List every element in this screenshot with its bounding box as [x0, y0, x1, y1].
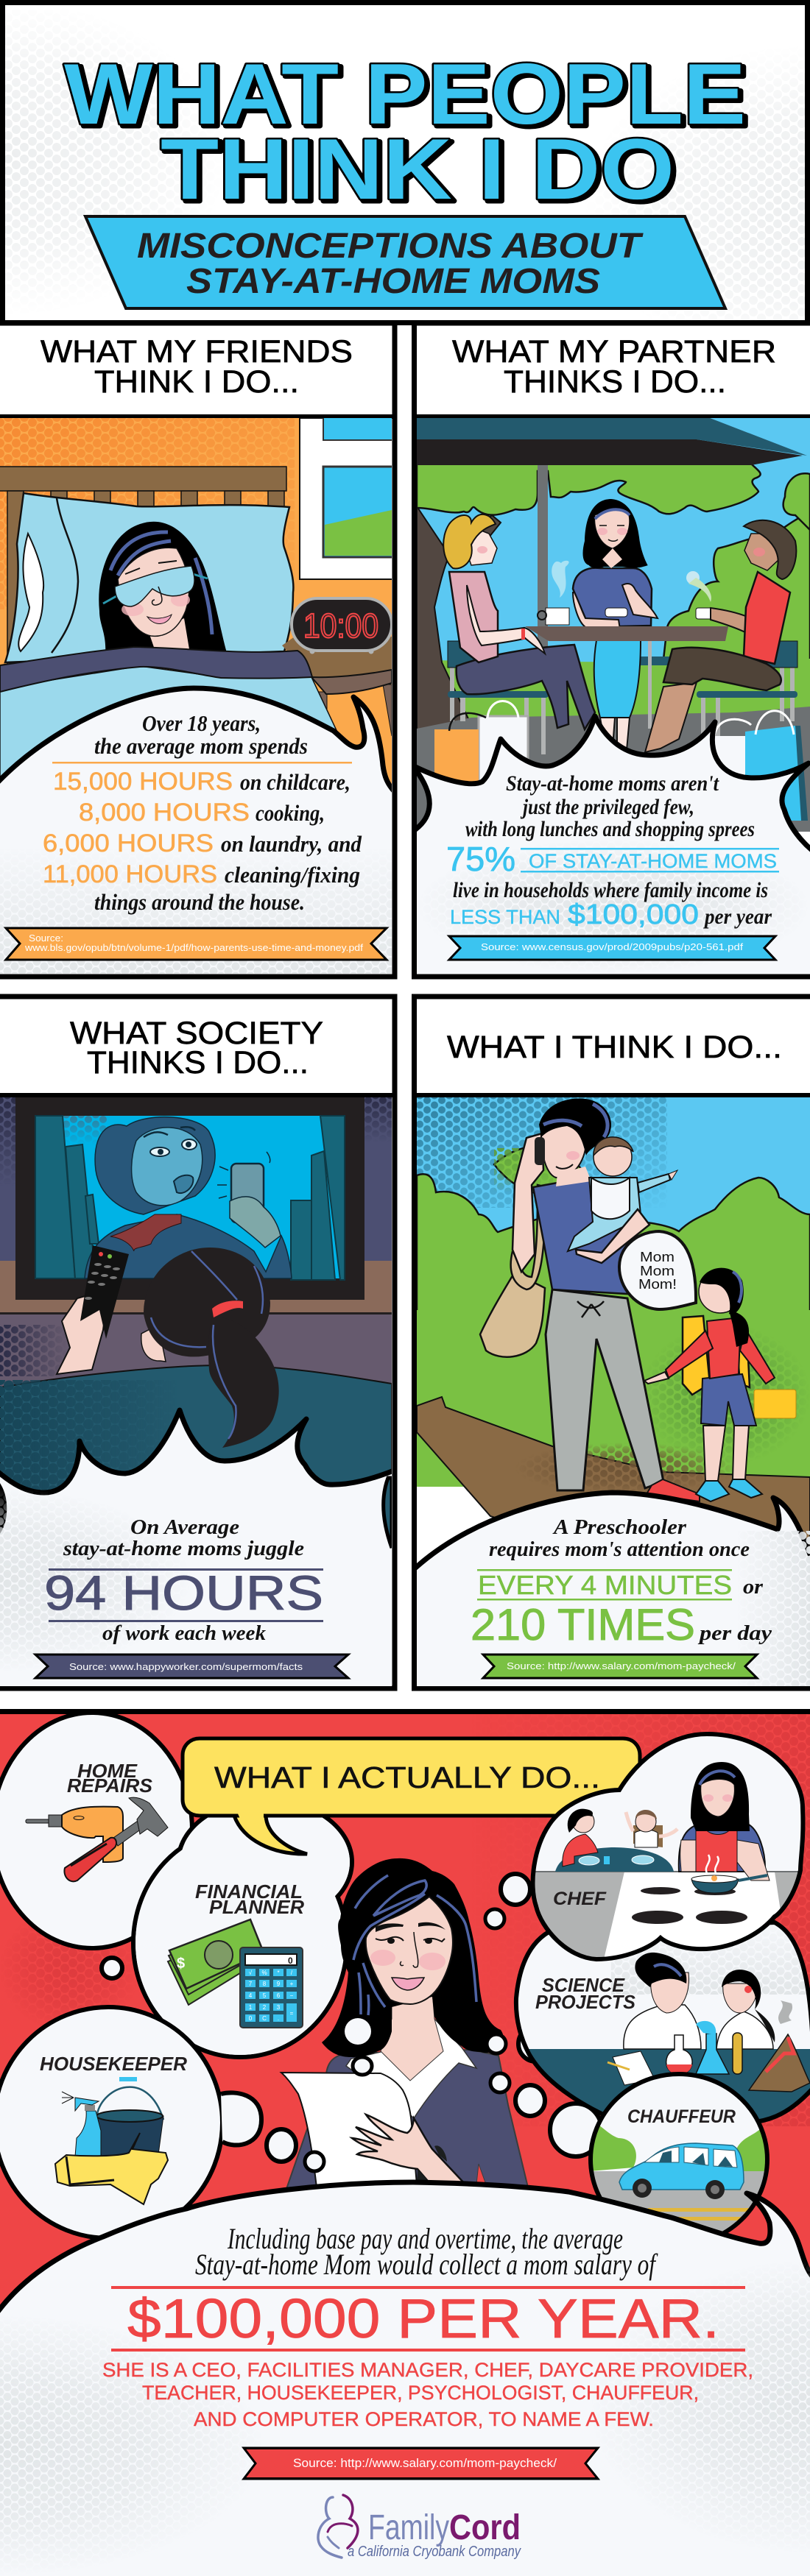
icon: calculator: 0 [249, 2015, 253, 2022]
title line: what people: WHAT PEOPLE [67, 48, 749, 144]
label: REPAIRS [67, 1774, 153, 1797]
source ribbon [6, 928, 387, 960]
headboard [0, 467, 286, 668]
frying pan [691, 1855, 767, 1893]
stats text: A Preschooler [552, 1516, 687, 1539]
speech bubble [412, 716, 810, 979]
heading: friends [40, 334, 353, 400]
icon: calculator: 1 [249, 2004, 253, 2011]
logo: familycord [318, 2495, 521, 2560]
heading: i think: WHAT I THINK I DO... [447, 1030, 782, 1065]
stats text: on childcare, [240, 769, 351, 795]
label: PROJECTS [535, 1991, 636, 2013]
neck and chest [381, 1991, 443, 2081]
stats text: the average mom spends [94, 733, 308, 759]
speech bubble [412, 1493, 810, 1693]
girl with backpack [644, 1268, 796, 1501]
thought bubble: science projects [508, 1914, 810, 2130]
brunette woman [645, 520, 796, 752]
stats text: 94 HOURS [44, 1565, 323, 1620]
heading: society: WHAT SOCIETY [70, 1016, 323, 1051]
viewer head with ponytail [141, 1248, 279, 1448]
dirt path [417, 1397, 810, 1619]
minivan [619, 2143, 744, 2199]
panel: header [0, 0, 810, 325]
speech bubble [0, 1410, 398, 1693]
roles list [102, 2359, 753, 2430]
blanket [0, 646, 337, 776]
illustration: mom with kids outdoors [412, 1097, 810, 1693]
thought dots near housekeeper [221, 2092, 324, 2171]
label: SCIENCE [542, 1974, 625, 1996]
sheet of paper [281, 2073, 417, 2187]
logo mark [318, 2495, 358, 2558]
logo wordmark: Cord [449, 2508, 521, 2547]
speech bubble: mom mom mom: Mom [640, 1264, 675, 1278]
thought bubble: financial planner [133, 1800, 352, 2057]
heading: society: THINKS I DO... [87, 1045, 309, 1080]
hand holding paper [352, 2115, 465, 2184]
pillow [5, 493, 293, 662]
umbrella [417, 418, 807, 646]
stats text: stay-at-home moms juggle [63, 1538, 304, 1560]
mom [480, 1098, 700, 1501]
paving [417, 707, 810, 832]
thought bubble: housekeeper [0, 2007, 222, 2238]
baby [568, 1137, 677, 1263]
panel: what i think i do [412, 997, 810, 1693]
face [366, 1897, 453, 2004]
title line: what people: WHAT PEOPLE [64, 46, 746, 142]
icon: calculator: 2 [263, 2004, 267, 2011]
stats text: 75% [446, 840, 515, 878]
stats text: 15,000 HOURS [53, 768, 233, 796]
subtitle banner: MISCONCEPTIONS ABOUT [137, 227, 644, 266]
stats text: EVERY 4 MINUTES [478, 1570, 732, 1600]
stats text: with long lunches and shopping sprees [465, 817, 755, 841]
stats text: LESS THAN [450, 906, 560, 928]
panel: what my partner thinks i do [412, 323, 810, 979]
stats text: Over 18 years, [142, 710, 261, 736]
stats text: just the privileged few, [521, 795, 694, 819]
stats text: cooking, [256, 800, 325, 826]
alarm clock [292, 598, 392, 654]
icon: calculator: 6 [277, 1992, 281, 1999]
subtitle banner [85, 216, 725, 308]
heading: partner [452, 334, 776, 400]
thought bubble: chef [523, 1730, 810, 1965]
center woman [573, 499, 658, 758]
icon: calculator: 5 [263, 1992, 267, 1999]
logo wordmark: a California Cryobank Company [348, 2544, 521, 2560]
roles list: TEACHER, HOUSEKEEPER, PSYCHOLOGIST, CHAUFFEUR, [142, 2382, 699, 2404]
window [300, 417, 395, 579]
label: HOUSEKEEPER [40, 2053, 187, 2075]
trees and bushes [417, 460, 810, 732]
title [64, 46, 749, 219]
label: PLANNER [209, 1896, 304, 1918]
panel: what my friends think i do [0, 323, 396, 979]
icon: calculator: 3 [277, 2004, 281, 2011]
thought bubble: chauffeur [589, 2072, 773, 2248]
source ribbon: Source: [29, 933, 63, 944]
heading: society [70, 1016, 323, 1080]
heading: partner: WHAT MY PARTNER [452, 334, 776, 369]
roles list: AND COMPUTER OPERATOR, TO NAME A FEW. [194, 2408, 654, 2430]
panel: what i actually do [0, 1709, 810, 2576]
stats text: per year [702, 905, 772, 929]
stats text: 6,000 HOURS [43, 829, 214, 857]
label: HOME [77, 1760, 138, 1782]
heading: friends: WHAT MY FRIENDS [40, 334, 353, 369]
source ribbon [449, 936, 775, 960]
stats text: per day [698, 1622, 772, 1645]
stats text [471, 1516, 772, 1649]
icon: calculator: − [290, 1992, 294, 1999]
sleeping mom [99, 522, 228, 655]
stats text: things around the house. [94, 889, 305, 915]
hand with remote [57, 1245, 129, 1374]
stats text [446, 771, 779, 930]
salary figure: $100,000 PER YEAR. [127, 2287, 719, 2349]
lab equipment [608, 2000, 810, 2092]
heading: partner: THINKS I DO... [504, 364, 726, 400]
bedside table [282, 637, 392, 736]
table [525, 626, 728, 641]
icon: calculator: % [261, 1970, 267, 1976]
handbag [480, 1185, 546, 1357]
speech bubble [0, 688, 396, 979]
thought bubble dot [102, 1958, 122, 1978]
logo wordmark: Family [368, 2508, 449, 2547]
chef mom [679, 1762, 770, 1880]
icon: calculator: 8 [263, 1981, 267, 1987]
intro text: Stay-at-home Mom would collect a mom salary of [195, 2248, 658, 2281]
speech bubble: mom mom mom: Mom [640, 1250, 675, 1264]
intro text: Including base pay and overtime, the average [227, 2222, 623, 2255]
label [67, 1760, 153, 1797]
logo wordmark [348, 2508, 521, 2560]
stats text: Stay-at-home moms aren't [506, 771, 719, 796]
bushes [417, 1144, 810, 1487]
source ribbon: www.bls.gov/opub/btn/volume-1/pdf/how-parents-use-time-and-money.pdf [24, 942, 363, 953]
stats text: $100,000 [568, 899, 699, 930]
table and children [555, 1809, 677, 1872]
icon: calculator: = [290, 2010, 294, 2017]
slit [476, 2164, 486, 2184]
heading bubble [183, 1738, 640, 1854]
alarm clock: 10:00 [303, 606, 378, 645]
thought dots near head [345, 1874, 602, 2156]
stats text: 210 TIMES [471, 1600, 695, 1649]
illustration: mom sleeping in bed [0, 417, 396, 979]
source ribbon: Source: http://www.salary.com/mom-paycheck/ [507, 1660, 736, 1671]
icon: calculator: + [290, 1981, 294, 1987]
main speech bubble with salary [0, 2182, 810, 2576]
icon: calculator: 0 [288, 1956, 293, 1966]
shirt [346, 2019, 476, 2118]
icon: money [168, 1919, 265, 2005]
label: CHEF [553, 1889, 607, 1909]
label: FINANCIAL [195, 1880, 303, 1903]
speech bubble: mom mom mom [619, 1231, 696, 1309]
cuff [417, 2145, 447, 2184]
icon: calculator: 4 [249, 1992, 253, 1999]
stats text: on laundry, and [221, 831, 362, 857]
shopping bags [434, 701, 808, 821]
icon: calculator: C [262, 2015, 267, 2022]
blonde woman [443, 514, 595, 729]
source ribbon [244, 2447, 598, 2480]
intro text [195, 2222, 658, 2281]
sofa [0, 1365, 392, 1490]
source ribbon: Source: http://www.salary.com/mom-paycheck/ [293, 2456, 557, 2470]
stats text: 8,000 HOURS [79, 799, 250, 827]
stats text: requires mom's attention once [489, 1538, 750, 1561]
scientist daughter [716, 1970, 775, 2049]
icon: calculator: / [291, 1970, 293, 1976]
icon: bucket, spray and gloves [55, 2077, 168, 2204]
icon: calculator: 7 [249, 1981, 253, 1987]
television [15, 1097, 364, 1300]
stats text: cleaning/fixing [225, 862, 360, 888]
stats text: of work each week [102, 1622, 266, 1645]
woman thinking [280, 1858, 528, 2208]
dress [280, 2050, 528, 2208]
panel: what society thinks i do [0, 997, 398, 1693]
subtitle banner: STAY-AT-HOME MOMS [186, 262, 600, 301]
heading bubble: WHAT I ACTUALLY DO... [214, 1761, 600, 1794]
title line: think i do: THINK I DO [163, 123, 677, 219]
stats text [43, 710, 362, 915]
label [195, 1880, 304, 1918]
hair [322, 1858, 504, 2057]
source ribbon [483, 1655, 757, 1678]
icon: calculator: √ [249, 1970, 253, 1976]
phone [217, 1152, 281, 1248]
illustration: watching television [0, 1097, 398, 1693]
heading: friends: THINK I DO... [94, 364, 299, 400]
stove burners [632, 1887, 747, 1924]
scientist mom [624, 1953, 701, 2049]
thought bubble: home repairs [0, 1713, 192, 1948]
icon: calculator: . [278, 2015, 279, 2022]
stats text: or [743, 1576, 764, 1599]
cups and steam [538, 561, 715, 625]
city buildings [35, 1116, 345, 1280]
source ribbon: Source: www.happyworker.com/supermom/facts [69, 1661, 303, 1672]
source ribbon [35, 1655, 348, 1678]
label: CHAUFFEUR [627, 2106, 736, 2127]
icon: calculator: 9 [277, 1981, 281, 1987]
stats text: On Average [130, 1516, 239, 1539]
stats text [44, 1516, 323, 1645]
chairs [448, 640, 797, 754]
speech bubble: mom mom mom: Mom! [638, 1277, 677, 1292]
roles list: SHE IS A CEO, FACILITIES MANAGER, CHEF, DAYCARE PROVIDER, [102, 2359, 753, 2381]
stats text: 11,000 HOURS [43, 860, 217, 888]
tv actress [85, 1117, 292, 1278]
illustration: women at cafe table [412, 417, 810, 979]
label [535, 1974, 636, 2013]
title line: think i do: THINK I DO [161, 121, 675, 217]
icon: calculator: * [277, 1970, 280, 1976]
icon: drill, hammer, screwdriver [26, 1797, 168, 1881]
source ribbon: Source: www.census.gov/prod/2009pubs/p20-561.pdf [481, 941, 743, 952]
icon: money: $ [177, 1956, 185, 1972]
stats text: OF STAY-AT-HOME MOMS [529, 850, 777, 872]
icon: calculator [240, 1947, 303, 2028]
